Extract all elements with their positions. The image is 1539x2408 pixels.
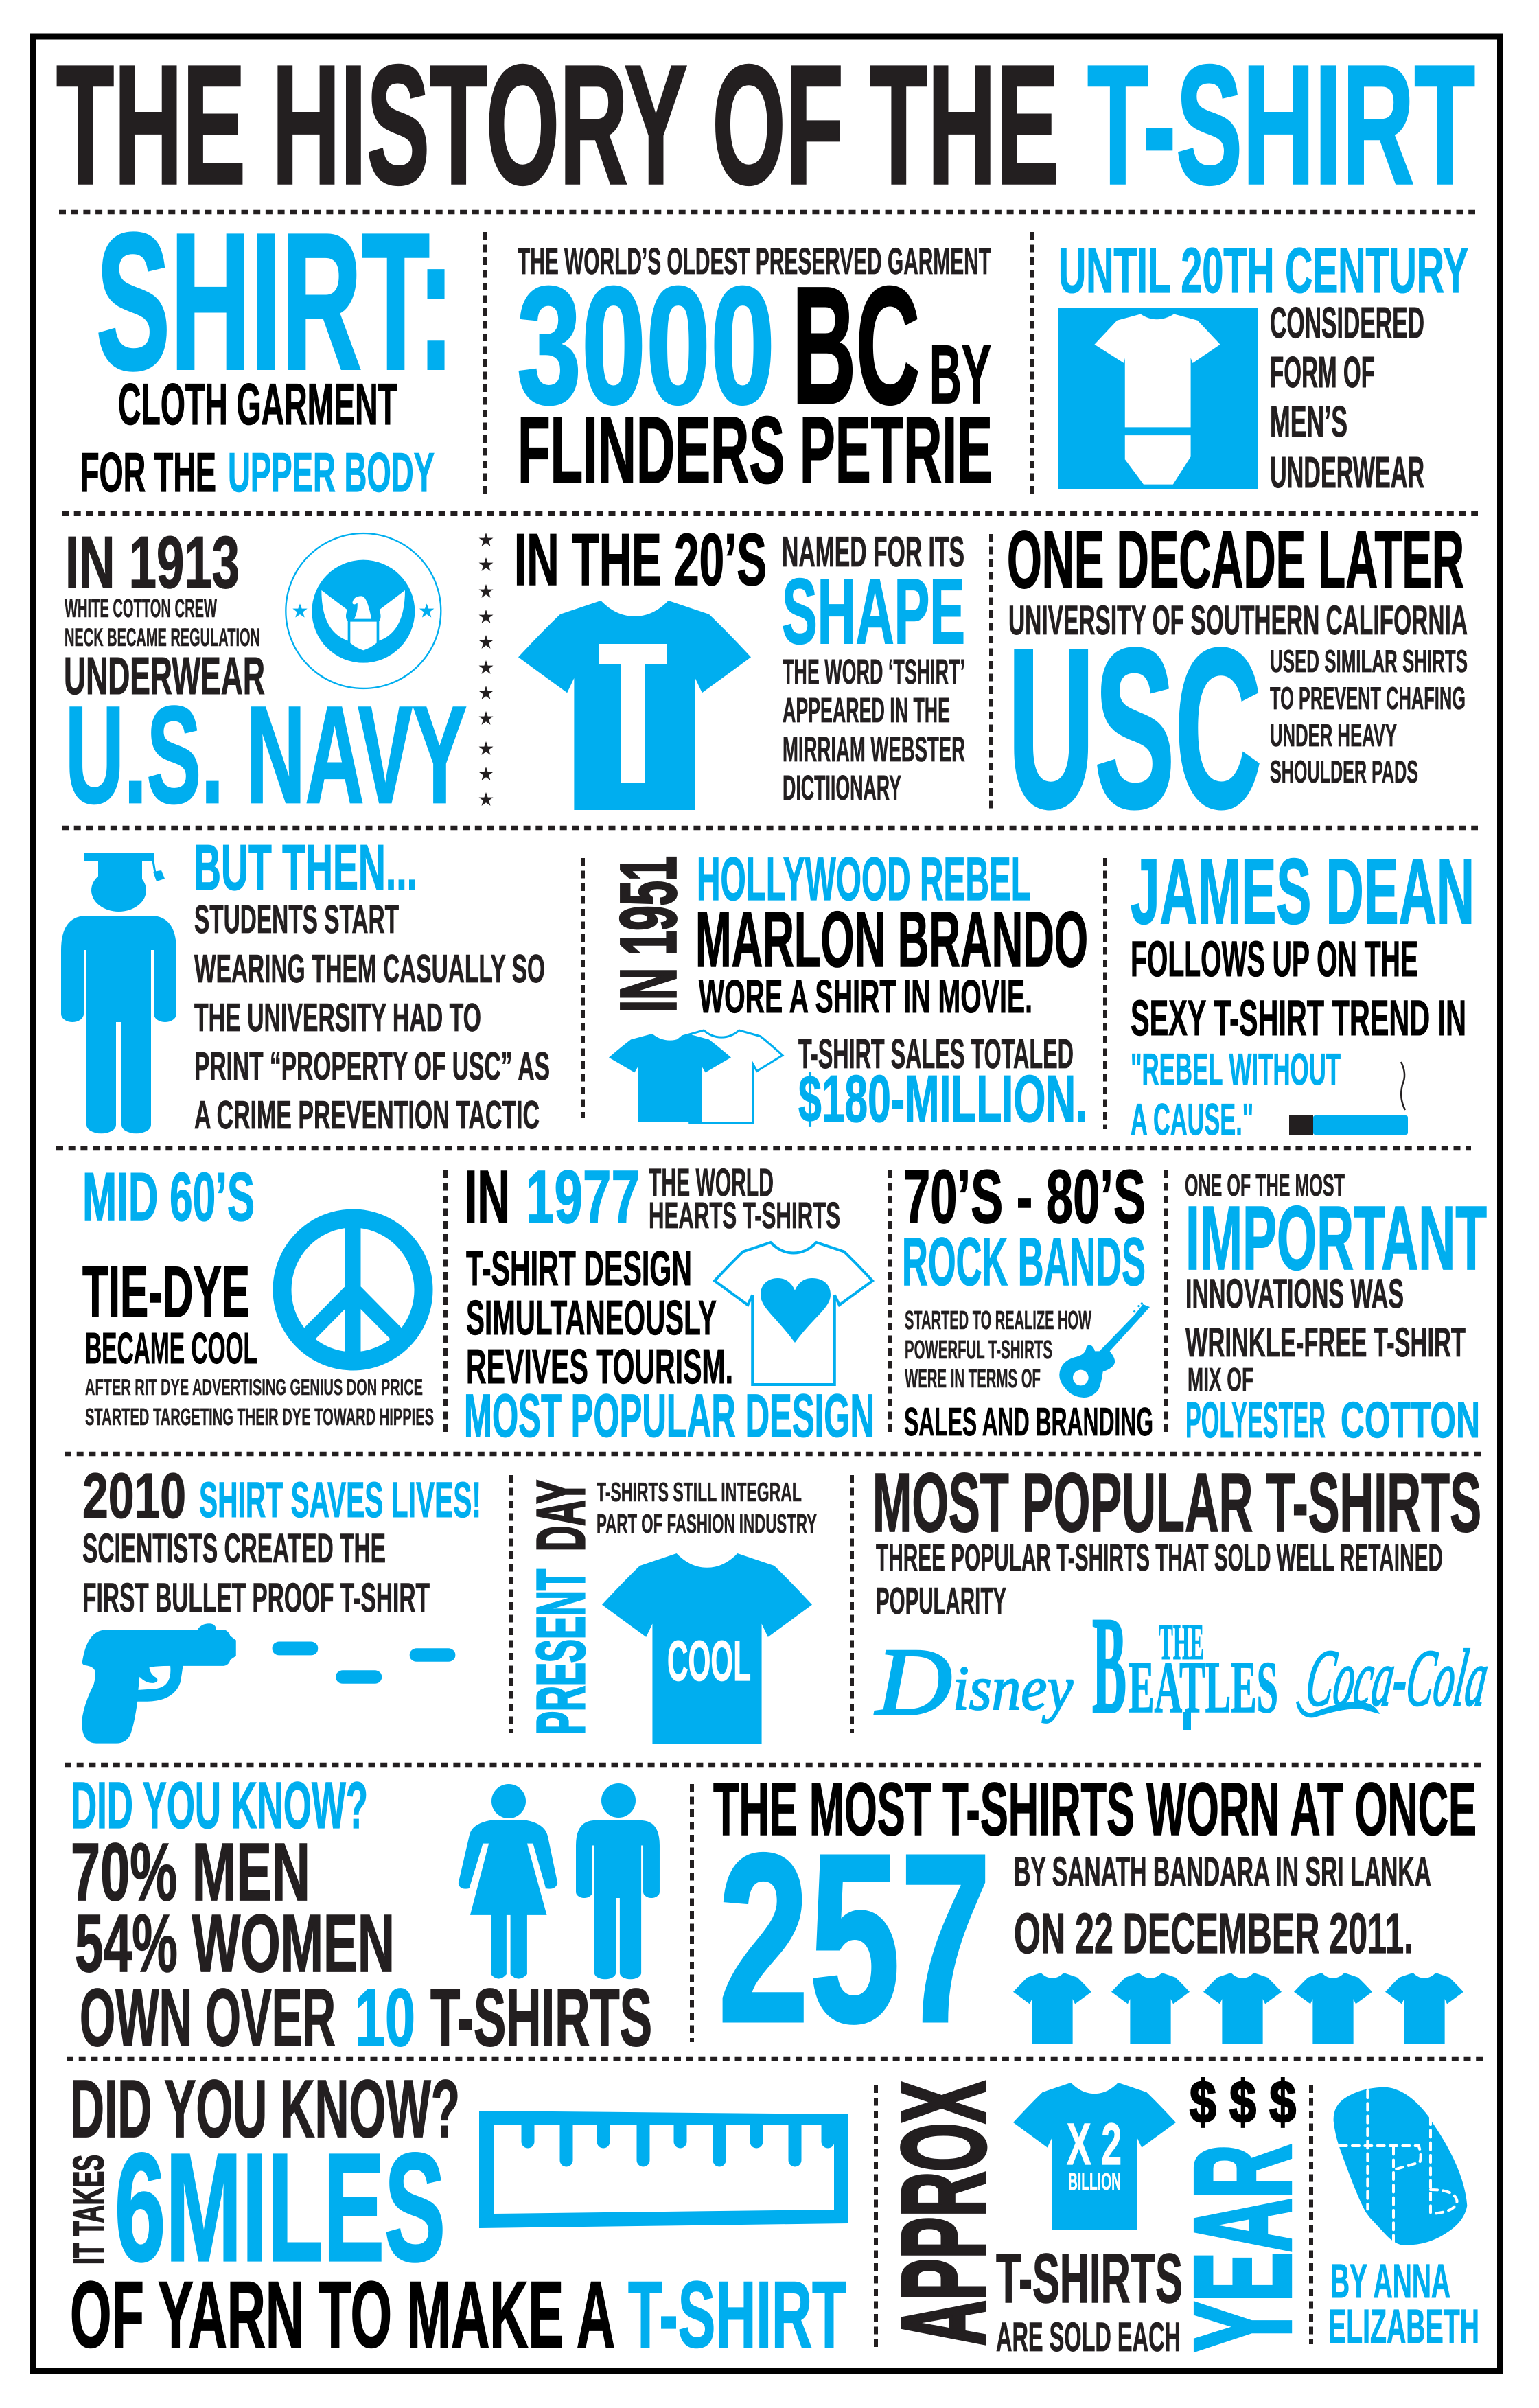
text: still integral: T-SHIRTS STILL INTEGRAL: [597, 1478, 802, 1507]
stat: 70% men: 70% MEN: [71, 1827, 310, 1918]
text: scientists created: [82, 1525, 430, 1621]
text: rebel without a cause: A CAUSE.": [1131, 1094, 1253, 1144]
icon: guitar: [1059, 1302, 1150, 1398]
text: own over 10 t-shirts: T-SHIRTS: [430, 1972, 652, 2063]
heading: mid 60's: MID 60’S: [82, 1159, 255, 1236]
text: of yarn to make a t-shirt: OF YARN TO MAKE A: [70, 2262, 615, 2368]
icon: man: [576, 1783, 660, 1979]
vertical heading: year: YEAR: [1167, 2144, 1319, 2352]
text: t-shirts are sold each: ARE SOLD EACH: [996, 2314, 1181, 2360]
text: rit dye: AFTER RIT DYE ADVERTISING GENIUS DON PRICE: [85, 1374, 423, 1400]
text: used similar shirts: UNDER HEAVY: [1270, 717, 1397, 753]
icon: cool tee: [602, 1553, 812, 1744]
text: innovations was: [1185, 1271, 1466, 1398]
text: t-shirt design: SIMULTANEOUSLY: [466, 1291, 717, 1345]
text: three popular: [876, 1536, 1443, 1622]
text: students start: STUDENTS START: [194, 897, 399, 942]
panel: in the 20's: [514, 518, 965, 810]
text: scientists created: FIRST BULLET PROOF T-SHIRT: [82, 1575, 430, 1621]
heading: in the 20's: IN THE 20’S: [514, 518, 767, 601]
text: t-shirt sales totaled: T-SHIRT SALES TOTALED: [798, 1030, 1074, 1077]
number: 3000 BC: BC: [792, 253, 920, 439]
icon: gun and bullets: [82, 1623, 455, 1744]
logo: The Beatles: [1092, 1588, 1278, 1742]
heading: in 1977: 1977: [526, 1155, 640, 1239]
text: own over 10 t-shirts: 10: [355, 1972, 415, 2063]
vertical heading: approx: APPROX: [878, 2081, 1010, 2346]
number: 3000 BC: 3000: [517, 253, 775, 439]
text: for the upper body: [80, 442, 435, 504]
panel: until 20th century: [1058, 235, 1468, 497]
heading: hollywood rebel: HOLLYWOOD REBEL: [697, 844, 1031, 913]
text: of yarn to make a t-shirt: T-SHIRT: [628, 2262, 846, 2368]
heading: shirt: SHIRT:: [96, 193, 454, 410]
text: for the upper body: FOR THE: [80, 442, 216, 504]
vertical text: it takes: IT TAKES: [65, 2155, 113, 2265]
text: used similar shirts: [1270, 643, 1468, 789]
number: 3000 BC: BY: [929, 327, 991, 421]
panel: oldest garment: [517, 241, 993, 503]
text: oldest preserved garment: THE WORLD’S OLDEST PRESERVED GARMENT: [518, 241, 991, 282]
panel: 1913 US Navy: [64, 521, 467, 832]
logo: The Beatles: B: [1092, 1588, 1126, 1742]
icon: peace sign: [282, 1218, 424, 1361]
icon: X 2 billion tee: [1013, 2083, 1176, 2230]
text: t-shirts are sold each: T-SHIRTS: [996, 2239, 1183, 2317]
text: underwear: UNDERWEAR: [64, 647, 265, 706]
text: considered form of men's underwear: FORM OF: [1270, 347, 1375, 397]
heading: did you know: DID YOU KNOW?: [71, 1769, 368, 1842]
text: white cotton crew: NECK BECAME REGULATION: [65, 623, 260, 651]
text: the world hearts t-shirts: [649, 1161, 840, 1236]
text: still integral: [597, 1478, 817, 1539]
text: students start: THE UNIVERSITY HAD TO: [194, 995, 481, 1040]
icon: two tees: [609, 1030, 783, 1123]
heading: USC: USC: [1008, 601, 1262, 855]
icon: cigarette: [1289, 1062, 1408, 1135]
text: t-shirt design: [466, 1242, 733, 1394]
text: students start: PRINT “PROPERTY OF USC” AS: [194, 1044, 550, 1089]
vertical heading: in 1951: IN 1951: [605, 856, 693, 1012]
panel: 6 miles of yarn: [65, 2063, 848, 2368]
number: 6 miles: 6MILES: [115, 2122, 445, 2293]
icon: X 2 billion tee: BILLION: [1068, 2168, 1121, 2195]
logo: The Beatles: THE: [1159, 1614, 1204, 1671]
panel: credit: [1328, 2087, 1479, 2353]
text: white cotton crew: WHITE COTTON CREW: [65, 594, 217, 623]
panel: 2010 bullet proof: [82, 1460, 481, 1744]
heading: 2010: 2010: [82, 1460, 186, 1531]
text: started to realize: STARTED TO REALIZE HOW: [905, 1306, 1091, 1335]
heading: in 1977: IN: [465, 1155, 510, 1239]
text: rebel without a cause: "REBEL WITHOUT: [1131, 1044, 1341, 1094]
panel: important innovations: [1185, 1168, 1487, 1448]
text: scientists created: SCIENTISTS CREATED THE: [82, 1525, 386, 1571]
icon: T tee: [518, 601, 751, 810]
logo: Disney: [875, 1629, 1073, 1735]
heading: 70's - 80's: 70’S - 80’S: [903, 1155, 1146, 1239]
text: polyester cotton: POLYESTER: [1185, 1391, 1326, 1448]
text: considered form of men's underwear: MEN’S: [1270, 397, 1347, 446]
panel: most popular t-shirts: [872, 1456, 1494, 1742]
icon: woman: [459, 1784, 557, 1979]
text: the word tshirt: APPEARED IN THE: [783, 691, 950, 730]
text: wore a shirt in movie: WORE A SHIRT IN MOVIE.: [699, 971, 1032, 1023]
stat: 54% women: 54% WOMEN: [75, 1898, 395, 1989]
icon: navy eagle badge: [286, 533, 441, 688]
icon: dollar signs: $ $ $: [1190, 2069, 1296, 2135]
heading: in 1977: [465, 1155, 640, 1239]
panel: present day: [522, 1478, 817, 1744]
icon: graduate figure: [61, 853, 176, 1133]
heading: 2010: SHIRT SAVES LIVES!: [199, 1472, 481, 1528]
text: the word tshirt: MIRRIAM WEBSTER: [783, 730, 965, 769]
panel: one decade later: [1007, 514, 1468, 855]
heading: shape: SHAPE: [782, 559, 965, 663]
text: for the upper body: UPPER BODY: [228, 442, 435, 504]
text: cloth garment: CLOTH GARMENT: [118, 372, 397, 437]
text: started to realize: POWERFUL T-SHIRTS: [905, 1336, 1052, 1365]
icon: row of five tees: [1013, 1973, 1463, 2044]
text: still integral: PART OF FASHION INDUSTRY: [597, 1509, 817, 1539]
heading: 2010: [82, 1460, 481, 1531]
text: by anna elizabeth: [1328, 2254, 1479, 2353]
text: started to realize: [905, 1306, 1091, 1393]
text: the world hearts t-shirts: HEARTS T-SHIRTS: [649, 1195, 840, 1236]
panel: shirt definition: [80, 193, 454, 504]
logo: Disney: isney: [953, 1653, 1073, 1723]
text: used similar shirts: SHOULDER PADS: [1270, 754, 1418, 789]
text: the word tshirt: [783, 652, 965, 807]
text: Flinders Petrie: FLINDERS PETRIE: [518, 397, 993, 503]
text: one of the most: ONE OF THE MOST: [1185, 1168, 1345, 1203]
text: t-shirts are sold each: [996, 2239, 1183, 2360]
panel: approx 2 billion: [878, 2069, 1319, 2360]
heading: in 1913: IN 1913: [65, 521, 240, 603]
text: the word tshirt: DICTIIONARY: [783, 768, 901, 807]
icon: X 2 billion tee: X 2: [1067, 2111, 1122, 2177]
heading: most popular design: MOST POPULAR DESIGN: [464, 1381, 875, 1450]
icon: stitched badge: [1334, 2087, 1467, 2245]
heading: but then: BUT THEN...: [194, 831, 417, 903]
text: started to realize: WERE IN TERMS OF: [905, 1365, 1041, 1393]
text: follows up: [1131, 931, 1466, 1046]
panel: 1977 design: [464, 1155, 875, 1450]
heading: tie-dye: TIE-DYE: [82, 1252, 250, 1332]
text: students start: A CRIME PREVENTION TACTIC: [194, 1093, 540, 1137]
panel: 1951 Marlon Brando: [605, 844, 1088, 1136]
text: students start: [194, 897, 550, 1137]
heading: marlon brando: MARLON BRANDO: [695, 896, 1088, 984]
heading: U.S. Navy: U.S. NAVY: [65, 678, 467, 832]
number: $180-million: $180-MILLION.: [798, 1061, 1087, 1136]
text: t-shirt design: REVIVES TOURISM.: [466, 1340, 733, 1394]
text: innovations was: MIX OF: [1188, 1362, 1253, 1398]
text: white cotton crew: [65, 594, 260, 651]
text: sales and branding: SALES AND BRANDING: [904, 1400, 1153, 1444]
logo: Disney: D: [875, 1629, 952, 1735]
icon: cool tee: COOL: [667, 1629, 751, 1693]
text: t-shirt design: T-SHIRT DESIGN: [466, 1242, 692, 1296]
icon: heart tee: [715, 1242, 872, 1385]
panel: James Dean: [1131, 840, 1474, 1144]
vertical heading: present day: DAY: [522, 1480, 599, 1551]
panel: rock bands: [902, 1155, 1153, 1444]
text: own over 10 t-shirts: OWN OVER: [80, 1972, 336, 2063]
logo: The Beatles: EATLES: [1129, 1647, 1278, 1728]
text: rebel without a cause: [1131, 1044, 1341, 1144]
text: rit dye: STARTED TARGETING THEIR DYE TOWARD HIPPIES: [85, 1404, 434, 1431]
text: the world hearts t-shirts: THE WORLD: [649, 1161, 774, 1205]
panel: most t-shirts worn: [713, 1768, 1477, 2072]
text: considered form of men's underwear: [1270, 298, 1424, 497]
divider: column of stars: [479, 533, 493, 806]
heading: did you know: DID YOU KNOW?: [70, 2063, 460, 2155]
text: three popular: POPULARITY: [876, 1579, 1006, 1622]
panel: did you know percentages: [71, 1769, 660, 2063]
icon: undershirt on blue square: [1058, 308, 1258, 489]
text: named for its: NAMED FOR ITS: [782, 529, 964, 576]
text: students start: WEARING THEM CASUALLY SO: [194, 947, 545, 991]
vertical heading: present day: PRESENT: [522, 1569, 599, 1735]
panel: but then students: [61, 831, 550, 1137]
icon: ruler: [479, 2111, 848, 2228]
text: the word tshirt: THE WORD ‘TSHIRT’: [783, 652, 965, 691]
heading: rock bands: ROCK BANDS: [902, 1223, 1146, 1299]
panel: mid 60's tie-dye: [82, 1159, 434, 1431]
text: became cool: BECAME COOL: [85, 1323, 257, 1373]
number: 257: 257: [718, 1804, 991, 2072]
text: rit dye: [85, 1374, 434, 1431]
